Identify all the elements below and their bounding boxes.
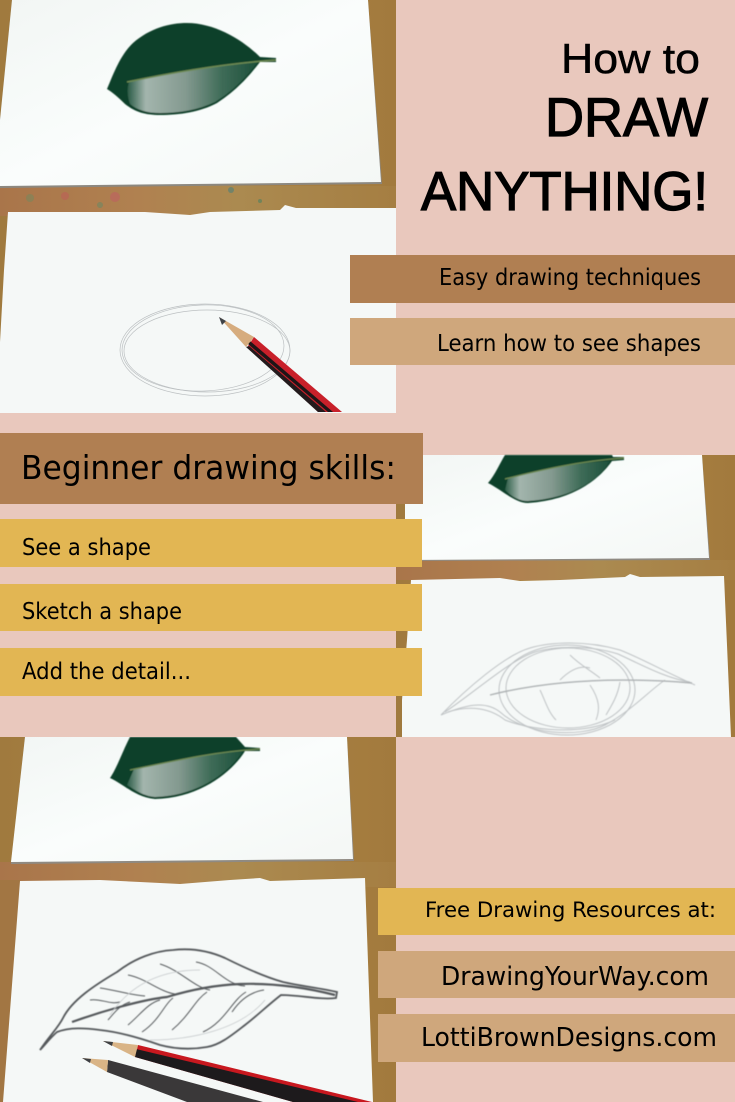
banner: learn how to see shapes: [350, 318, 735, 365]
paper sheet with leaf: [405, 455, 710, 561]
pencils: [82, 1041, 372, 1102]
oval pencil outlines: [120, 302, 290, 396]
pencil: [219, 317, 342, 412]
skill bar: see a shape: See a shape: [22, 535, 151, 561]
heading: beginner drawing skills: [0, 433, 423, 504]
banner: free drawing resources: [378, 888, 735, 935]
paper sheet with leaf: [0, 0, 382, 188]
skill bar: sketch a shape: [0, 584, 422, 631]
banner: free drawing resources: Free Drawing Resources at:: [425, 898, 716, 922]
banner: easy drawing techniques: [350, 255, 735, 303]
pink band beneath first photo: [0, 413, 396, 455]
real leaf, cropped: [110, 737, 260, 799]
photo: finished leaf drawing: [0, 737, 396, 1102]
title: How to: [561, 35, 700, 82]
torn paper sheet: [3, 878, 373, 1102]
leaf outline sketch: [441, 643, 695, 735]
skill bar: add the detail: [0, 648, 422, 696]
detailed leaf drawing: [40, 949, 337, 1050]
title: ANYTHING!: [421, 160, 708, 222]
banner: easy drawing techniques: Easy drawing techniques: [439, 265, 701, 291]
heading: beginner drawing skills: Beginner drawing skills:: [21, 448, 396, 487]
torn paper sheet: [402, 574, 731, 737]
skill bar: see a shape: [0, 519, 422, 567]
paper sheet with leaf: [11, 737, 354, 864]
title: DRAW: [545, 86, 708, 148]
banner: lottibrowndesigns.com: [378, 1014, 735, 1062]
banner: drawingyourway.com: DrawingYourWay.com: [441, 962, 709, 992]
photo: outline sketch of leaf: [396, 455, 735, 737]
title: [421, 35, 708, 222]
real leaf, cropped: [488, 455, 624, 503]
photo: leaf and oval sketch: [0, 0, 396, 413]
left pink panel: [0, 455, 396, 737]
torn paper sheet with oval sketch: [0, 205, 396, 413]
real leaf: [107, 23, 276, 115]
banner: drawingyourway.com: [378, 951, 735, 998]
banner: lottibrowndesigns.com: LottiBrownDesigns.com: [421, 1023, 717, 1053]
banner: learn how to see shapes: Learn how to see shapes: [437, 331, 701, 357]
skill bar: sketch a shape: Sketch a shape: [22, 599, 182, 625]
skill bar: add the detail: Add the detail...: [22, 659, 191, 685]
